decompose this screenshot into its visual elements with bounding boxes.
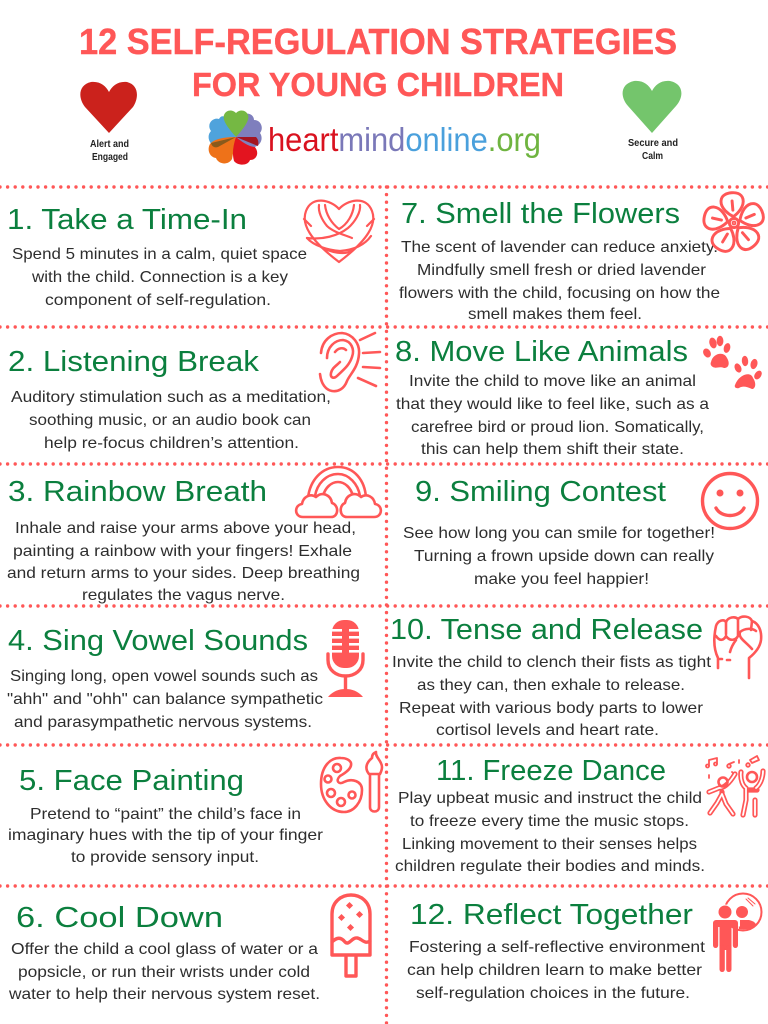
icon: ear with sound lines [320,333,380,391]
text block [12,246,307,309]
heading: 2. Listening Break [8,346,260,378]
title: 12 SELF-REGULATION STRATEGIES [79,21,677,62]
heading: 5. Face Painting [19,765,244,797]
text block [403,525,715,588]
icon: smiley face [702,474,758,528]
heading: 7. Smell the Flowers [401,198,680,230]
text block: self-regulation choices in the future. [416,985,690,1002]
panel: 1 take a time-in [7,201,374,309]
text block: make you feel happier! [474,571,649,588]
text block: Spend 5 minutes in a calm, quiet space [12,246,307,263]
panel: 3 rainbow breath [7,467,381,604]
text block: Pretend to “paint” the child’s face in [30,806,301,823]
text block: smell makes them feel. [468,306,642,323]
heading: 9. Smiling Contest [415,476,666,508]
text block: cortisol levels and heart rate. [436,722,659,739]
text block: regulates the vagus nerve. [82,587,285,604]
icon: clenched fist [714,617,761,678]
heading: 6. Cool Down [16,902,223,934]
text block: "ahh" and "ohh" can balance sympathetic [7,691,323,708]
text block: to freeze every time the music stops. [410,813,689,830]
logo: heartmindonline.org [209,111,541,165]
logo: heartmindonline.org: heartmindonline.org [268,121,541,158]
heading: 8. Move Like Animals [395,336,688,368]
text block: popsicle, or run their wrists under cold [18,964,310,981]
text block: Turning a frown upside down can really [414,548,714,565]
text block: as they can, then exhale to release. [417,677,685,694]
icon: hugging heart [304,201,374,262]
text block [11,389,331,452]
text block: Mindfully smell fresh or dried lavender [417,262,707,279]
panel: 11 freeze dance [395,755,763,875]
heading: 10. Tense and Release [390,614,703,646]
text block: Auditory stimulation such as a meditation, [11,389,331,406]
title: FOR YOUNG CHILDREN [192,66,564,103]
text block: Linking movement to their senses helps [402,836,697,853]
panel: 5 face painting [8,752,382,866]
heading: 3. Rainbow Breath [8,476,267,508]
panel: 10 tense and release [390,614,761,739]
icon: person looking in a mirror [711,894,762,972]
panel: 7 smell the flowers [399,192,766,323]
icon: red heart, alert and engaged: Alert and [90,139,129,150]
panel: 4 sing vowel sounds [7,620,363,731]
icon: flower [702,192,766,255]
text block [8,941,320,1003]
icon: green heart, secure and calm: Secure and [628,138,678,149]
text block [7,520,360,604]
text block: that they would like to feel like, such as a [396,396,709,413]
heading: 12. Reflect Together [410,899,693,931]
text block: with the child. Connection is a key [31,269,288,286]
icon: popsicle [332,895,370,976]
heading: 4. Sing Vowel Sounds [8,625,308,657]
panel: 2 listening break [8,333,380,452]
icon: rainbow and clouds [296,467,381,517]
text block: See how long you can smile for together! [403,525,715,542]
panel: 6 cool down [8,895,370,1003]
text block [7,668,323,731]
text block [392,654,712,739]
panel: 9 smiling contest [403,474,758,588]
header [79,21,681,165]
text block: Singing long, open vowel sounds such as [10,668,318,685]
text block [399,239,720,323]
text block: soothing music, or an audio book can [29,412,311,429]
text block: and parasympathetic nervous systems. [14,714,312,731]
text block: Fostering a self-reflective environment [409,939,706,956]
text block: to provide sensory input. [71,849,259,866]
text block: Invite the child to move like an animal [409,373,696,390]
icon: green heart, secure and calm [623,81,681,162]
heading: 1. Take a Time-In [7,204,247,236]
text block: this can help them shift their state. [421,441,684,458]
heading: 11. Freeze Dance [436,755,666,787]
title [79,21,677,103]
text block: help re-focus children’s attention. [44,435,299,452]
text block: flowers with the child, focusing on how the [399,285,720,302]
text block [407,939,706,1002]
icon: microphone [328,620,363,697]
text block: Inhale and raise your arms above your head, [15,520,356,537]
text block: children regulate their bodies and minds. [395,858,705,875]
icon: paw prints [701,336,763,389]
text block: painting a rainbow with your fingers! Exhale [13,543,352,560]
text block: Repeat with various body parts to lower [399,700,704,717]
text block: can help children learn to make better [407,962,703,979]
text block [8,806,324,866]
text block: imaginary hues with the tip of your finger [8,827,324,844]
panel: 8 move like animals [395,336,763,458]
icon: palette and brush [321,752,382,812]
text block [395,790,705,875]
text block: component of self-regulation. [45,292,271,309]
text block: The scent of lavender can reduce anxiety. [401,239,718,256]
icon: green heart, secure and calm: Calm [642,151,663,162]
text block: Offer the child a cool glass of water or a [11,941,318,958]
icon: red heart, alert and engaged: Engaged [92,152,128,163]
text block: water to help their nervous system reset. [8,986,320,1003]
text block: carefree bird or proud lion. Somatically, [411,419,704,436]
icon: dancing people and music notes [706,756,763,815]
text block: Play upbeat music and instruct the child [398,790,702,807]
text block [396,373,709,458]
icon: red heart, alert and engaged [80,82,137,163]
text block: and return arms to your sides. Deep breathing [7,565,360,582]
text block: Invite the child to clench their fists as tight [392,654,712,671]
panel: 12 reflect together [407,894,762,1002]
